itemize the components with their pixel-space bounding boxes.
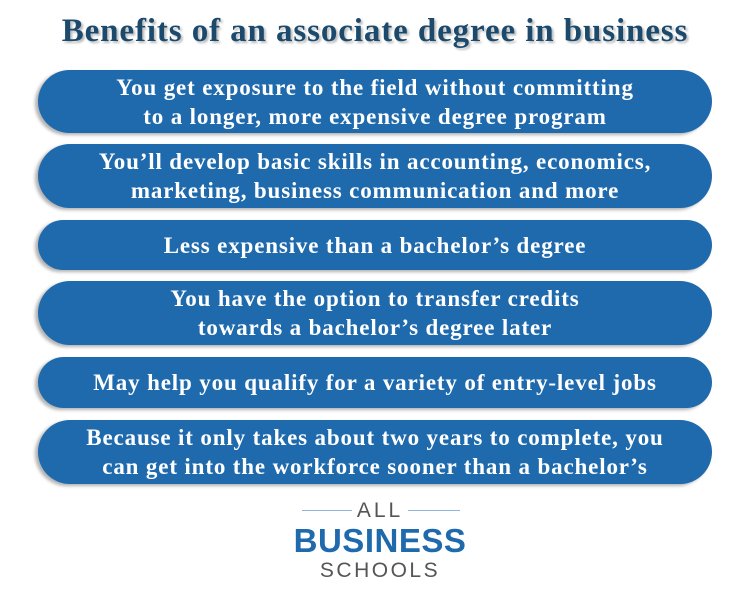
pill: skills (38, 144, 712, 208)
pill: cost: Less expensive than a bachelor’s degree (164, 232, 586, 258)
pill: workforce (38, 420, 712, 484)
pill: cost (38, 220, 712, 270)
pill: workforce: can get into the workforce sooner than a bachelor’s (102, 454, 648, 479)
pill: transfer (38, 281, 712, 345)
pill: jobs (38, 357, 712, 408)
pill: skills: marketing, business communication and more (131, 178, 619, 203)
pill: workforce: Because it only takes about two years to complete, you (86, 425, 664, 450)
pill: jobs: May help you qualify for a variety of entry-level jobs (93, 370, 657, 395)
pill: transfer: You have the option to transfer credits (170, 286, 580, 311)
logo: SCHOOLS (320, 559, 440, 582)
pill: exposure (38, 70, 712, 133)
pill: skills: You’ll develop basic skills in accounting, economics, (99, 149, 651, 174)
pill: exposure: to a longer, more expensive degree program (143, 104, 607, 128)
logo: BUSINESS (294, 522, 466, 559)
title: Benefits of an associate degree in business (62, 13, 688, 49)
logo (294, 499, 466, 582)
pill: transfer: towards a bachelor’s degree later (198, 315, 552, 340)
logo: ALL (357, 499, 403, 522)
pill: exposure: You get exposure to the field without committing (116, 74, 634, 100)
